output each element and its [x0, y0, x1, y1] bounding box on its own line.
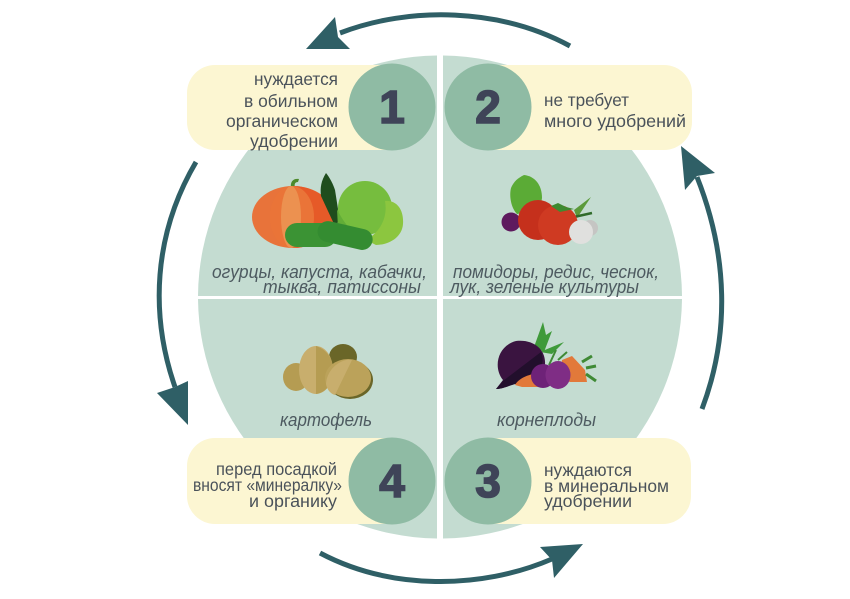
- arrow: right: [681, 146, 722, 409]
- caption: cucurbits: тыква, патиссоны: [263, 277, 421, 297]
- arrow: bottom: [320, 544, 583, 582]
- banner 2: 2: [475, 81, 501, 133]
- banner 1: 1: [379, 81, 405, 133]
- caption: cucurbits: огурцы, капуста, кабачки,: [212, 262, 427, 282]
- caption: tomatoes group: лук, зеленые культуры: [449, 277, 639, 297]
- banner 4 text: вносят «минералку»: [193, 475, 342, 495]
- banner 4: [187, 438, 436, 524]
- arrow: left: [157, 162, 196, 425]
- banner 3 text: в минеральном: [544, 476, 669, 496]
- banner 1 text: удобрении: [250, 131, 338, 151]
- banner 3 text: [544, 460, 669, 511]
- banner 2: [444, 64, 692, 150]
- arrow: top: [306, 15, 570, 49]
- caption: cucurbits: [212, 262, 427, 297]
- caption: tomatoes group: помидоры, редис, чеснок,: [453, 262, 659, 282]
- icon: tomatoes, radish, garlic, greens: [502, 175, 598, 245]
- banner 3 text: удобрении: [544, 491, 632, 511]
- banner 3 text: нуждаются: [544, 460, 632, 480]
- icon: potatoes: [283, 344, 373, 399]
- banner 1 text: в обильном: [244, 91, 338, 111]
- banner 1 text: органическом: [226, 111, 338, 131]
- banner 1 text: [226, 69, 338, 151]
- banner 3: 3: [475, 455, 501, 507]
- banner 4 text: [193, 459, 342, 511]
- quartered circle background: [198, 56, 682, 538]
- banner 2 text: много удобрений: [544, 111, 686, 131]
- banner 2 text: не требует: [544, 90, 629, 110]
- banner 4 text: и органику: [249, 491, 337, 511]
- banner 1 text: нуждается: [254, 69, 338, 89]
- caption: tomatoes group: [449, 262, 659, 297]
- caption: potato: картофель: [280, 410, 372, 430]
- icon: pumpkin, zucchini, cabbage, cucumbers: [252, 173, 403, 252]
- banner 2 text: [544, 90, 686, 131]
- banner 1: [187, 64, 436, 151]
- icon: beet, carrots, onions: [496, 322, 596, 389]
- banner 4 text: перед посадкой: [216, 459, 337, 479]
- banner 3: [444, 438, 691, 524]
- caption: root vegetables: корнеплоды: [497, 410, 596, 430]
- banner 4: 4: [379, 455, 405, 507]
